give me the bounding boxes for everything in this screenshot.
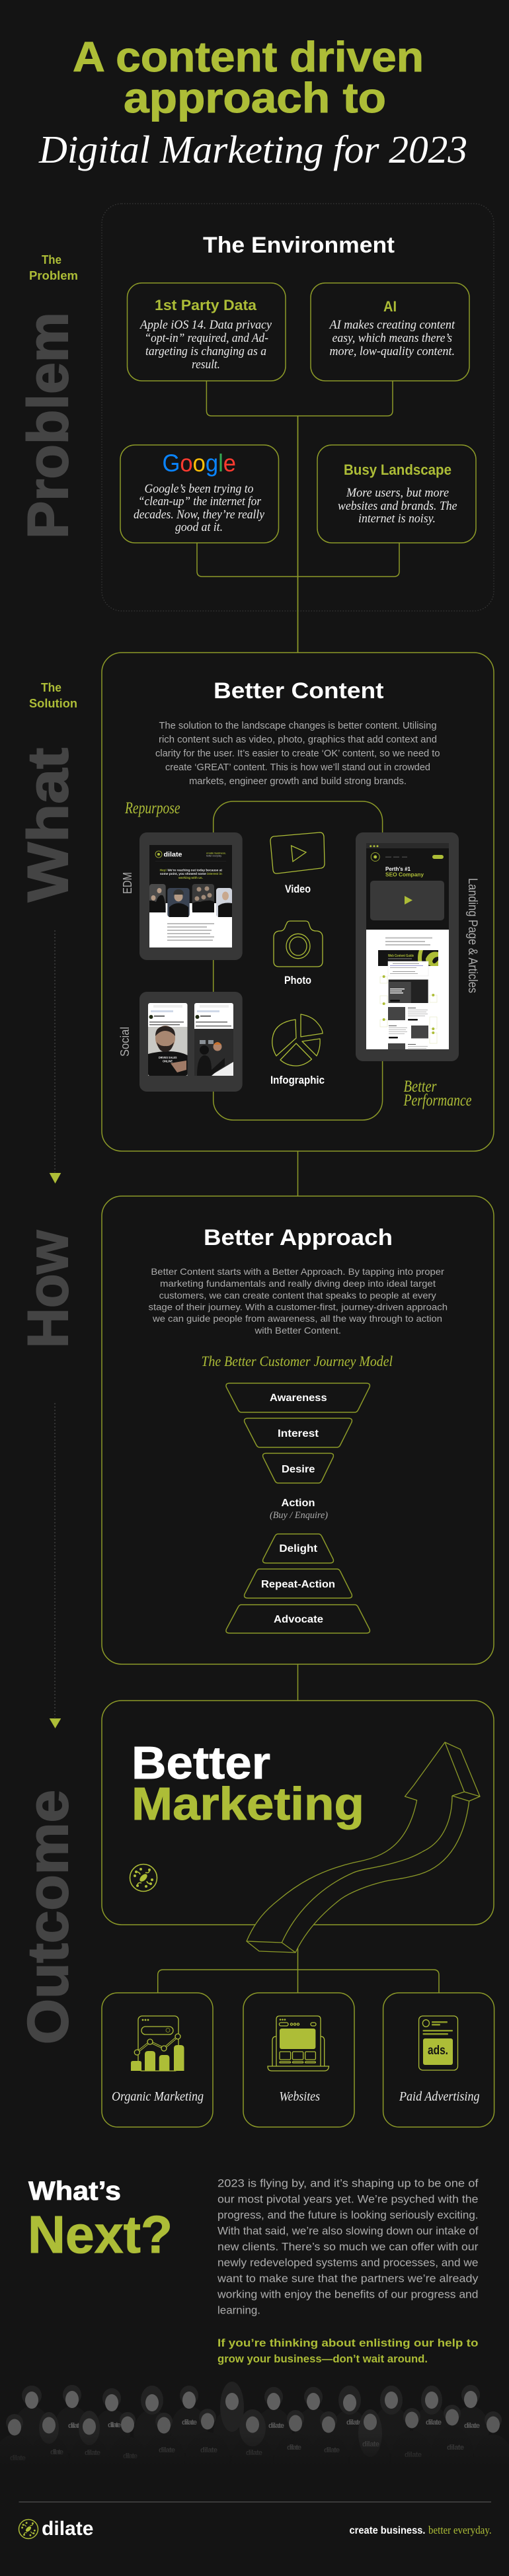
heading: Better Approach: Better Approach <box>204 1225 393 1250</box>
footer: tagline <box>349 2524 492 2536</box>
title <box>38 33 467 171</box>
heading: Better Marketing <box>132 1737 364 1830</box>
back row <box>13 2382 489 2457</box>
device: Landing page: Perth’s #1 <box>385 866 411 872</box>
text block: what's next copy <box>217 2177 479 2316</box>
connector: top cards <box>206 381 393 416</box>
text block: approach copy: Better Content starts with a Better Approach. By tapping into proper <box>151 1266 444 1277</box>
web content guide banner: Web Content Guide <box>388 954 414 958</box>
arrow: dashed down to Outcome <box>50 1403 61 1728</box>
heading: Better Marketing: Marketing <box>132 1778 364 1830</box>
body text placeholder lines <box>167 923 214 941</box>
icon: camera <box>274 921 323 967</box>
icon: website laptop <box>268 2016 329 2071</box>
card: AI: more, low-quality content. <box>329 344 455 358</box>
card: 1st Party Data: 1st Party Data <box>155 297 257 313</box>
card: Busy Landscape: More users, but more <box>346 486 449 500</box>
front row: dilate <box>447 2444 464 2452</box>
card: AI: easy, which means there’s <box>332 331 452 345</box>
heading: Better Marketing: Better <box>132 1737 270 1789</box>
front row: dilate <box>123 2452 137 2460</box>
card: Google: Google’s been trying to <box>144 482 254 496</box>
label: EDM: EDM <box>121 872 134 894</box>
text block: what's next copy: new clients. There’s so much we can offer with our <box>217 2241 479 2253</box>
front row: dilate <box>50 2448 63 2456</box>
card: 1st Party Data: result. <box>192 358 220 372</box>
card: 1st Party Data <box>127 283 286 381</box>
icon: ads phone <box>419 2016 457 2070</box>
panel: Better Approach <box>102 1196 494 1664</box>
heading: What's Next?: What’s <box>28 2177 121 2206</box>
connector: marketing to services <box>158 1947 439 1993</box>
funnel: Delight: Delight <box>279 1543 318 1554</box>
footer: dilate logo: dilate <box>42 2518 94 2540</box>
text block: what's next copy: 2023 is flying by, and it’s shaping up to be one of <box>217 2177 479 2189</box>
content loop outline <box>214 801 383 1120</box>
label: Better Performance: Better <box>403 1078 437 1096</box>
card: Paid Advertising <box>383 1993 494 2127</box>
icon: video <box>270 832 325 873</box>
card: 1st Party Data: Apple iOS 14. Data privacy <box>139 318 272 332</box>
photo: team <box>0 2382 509 2498</box>
section label: The Solution: Solution <box>29 697 77 710</box>
label: Video: Video <box>285 883 311 895</box>
vertical heading: Outcome: Outcome <box>17 1790 80 2044</box>
text block: solution copy: clarity for the user. It’s easier to create ‘OK’ content, so we need to <box>155 748 440 759</box>
card: Google: “clean-up” the internet for <box>138 495 262 508</box>
title: Digital Marketing for 2023 <box>38 128 467 171</box>
text block: solution copy: rich content such as video, photo, graphics that add context and <box>159 735 437 745</box>
front row: dilate <box>405 2451 422 2459</box>
text block: approach copy: with Better Content. <box>254 1325 341 1336</box>
label: Landing Page & Articles: Landing Page & Articles <box>465 878 479 993</box>
web content guide banner <box>378 950 438 966</box>
text block: what's next copy: want to make sure that the partners we’re already <box>217 2273 479 2284</box>
card: Organic Marketing <box>102 1993 213 2127</box>
social post one <box>148 1003 188 1076</box>
card: Busy Landscape: websites and brands. The <box>338 499 457 513</box>
card: Paid Advertising: Paid Advertising <box>399 2089 480 2104</box>
text block: approach copy: customers, we can create content that speaks to people at every <box>159 1290 436 1301</box>
text block: what's next copy: our most pivotal years yet. We’re psyched with the <box>217 2193 479 2205</box>
heading: The Environment: The Environment <box>203 233 395 258</box>
device: Landing page: SEO Company <box>385 871 424 878</box>
funnel: Desire <box>263 1453 333 1483</box>
card: AI <box>311 283 469 381</box>
icon: ads phone: ads. <box>428 2044 448 2058</box>
card: Busy Landscape <box>317 445 476 543</box>
text block: solution copy: markets, engineer growth and build strong brands. <box>189 776 407 787</box>
front row: dilate <box>10 2454 26 2462</box>
callout: call to action <box>217 2337 479 2365</box>
funnel: Awareness: Awareness <box>270 1392 327 1404</box>
front row: dilate <box>246 2449 262 2457</box>
label: Better Performance: Performance <box>403 1092 472 1109</box>
section label: The Problem <box>29 253 78 282</box>
front row: dilate <box>324 2446 340 2454</box>
social post two <box>194 1003 233 1076</box>
front row: dilate <box>362 2440 379 2448</box>
connector: content to approach <box>297 1151 299 1196</box>
footer: tagline: better everyday. <box>428 2524 492 2536</box>
text block: approach copy <box>148 1266 448 1336</box>
icon: growth arrow <box>247 1742 480 1952</box>
section label: The Solution <box>29 681 77 710</box>
label: Infographic: Infographic <box>270 1074 325 1086</box>
device: Social posts <box>139 992 243 1092</box>
text block: what's next copy: With that said, we’re also slowing down our intake of <box>217 2225 479 2237</box>
card: Google <box>120 445 279 543</box>
funnel: Desire: Desire <box>282 1464 315 1475</box>
footer: tagline: create business. <box>349 2525 426 2536</box>
panel: The Environment <box>102 204 494 611</box>
back row: dilate <box>268 2422 284 2430</box>
panel: Better Marketing <box>102 1701 494 1925</box>
device: EDM email: dilate <box>164 852 182 858</box>
front row: dilate <box>287 2444 301 2452</box>
back row: dilate <box>464 2422 480 2430</box>
device: Landing page <box>356 832 459 1061</box>
funnel: Action: (Buy / Enquire) <box>270 1510 328 1521</box>
funnel: Advocate <box>226 1605 370 1633</box>
photo: team group <box>149 884 166 912</box>
front row: dilate <box>200 2446 217 2454</box>
panel: Better Content <box>102 653 494 1151</box>
connector line over environment <box>297 416 299 653</box>
funnel: Awareness <box>226 1383 370 1412</box>
icon: dilate mark <box>130 1865 157 1891</box>
funnel: Advocate: Advocate <box>274 1614 323 1625</box>
label: Repurpose: Repurpose <box>124 799 180 817</box>
funnel: Repeat-Action: Repeat-Action <box>261 1579 335 1590</box>
icon: organic chart <box>131 2016 184 2071</box>
label: Better Performance <box>403 1078 472 1109</box>
device: EDM email: Hey! We’re reaching out today because at <box>160 869 223 871</box>
vertical heading: Problem: Problem <box>17 312 80 539</box>
funnel: Interest <box>245 1418 352 1447</box>
device: EDM email: create business. <box>206 852 226 854</box>
connector: approach to marketing <box>297 1664 299 1701</box>
heading: What's Next?: Next? <box>28 2205 173 2264</box>
footer divider <box>19 2501 491 2503</box>
front row <box>0 2405 509 2491</box>
funnel: Repeat-Action <box>245 1569 352 1598</box>
vertical heading: How: How <box>17 1230 80 1348</box>
label: Social: Social <box>118 1027 132 1057</box>
social post one: DRIVES SALES <box>159 1056 177 1059</box>
callout: call to action: grow your business—don’t wait around. <box>217 2353 428 2365</box>
icon: Google wordmark: Google <box>163 450 236 477</box>
funnel: Action <box>270 1498 328 1521</box>
funnel: Interest: Interest <box>278 1428 319 1439</box>
back row: dilate <box>426 2419 442 2427</box>
text block: what's next copy: newly redeveloped systems and processes, and we <box>217 2257 479 2269</box>
card: Google: decades. Now, they’re really <box>134 508 265 522</box>
card: 1st Party Data: “opt-in” required, and Ad- <box>144 331 268 345</box>
card: AI: AI makes creating content <box>329 318 455 332</box>
card: AI: AI <box>383 298 397 315</box>
text block: what's next copy: progress, and the future is looking seriously exciting. <box>217 2209 479 2221</box>
photo: man with cap <box>167 888 190 917</box>
back row: dilate <box>108 2421 121 2429</box>
device: EDM email: better everyday <box>206 854 221 857</box>
card: Websites: Websites <box>279 2089 320 2104</box>
card: Organic Marketing: Organic Marketing <box>112 2089 204 2104</box>
heading: What's Next? <box>28 2177 173 2264</box>
back row: dilate <box>346 2419 362 2427</box>
card: Busy Landscape: Busy Landscape <box>344 462 451 478</box>
callout: call to action: If you’re thinking about enlisting our help to <box>217 2337 479 2349</box>
icon: pie chart <box>272 1014 323 1066</box>
text block: solution copy: create ‘GREAT’ content. This is how we’ll stand out in crowded <box>165 762 430 773</box>
page annotations <box>380 975 437 1043</box>
device: EDM email: working with us. <box>178 876 203 879</box>
photo: woman <box>216 888 232 917</box>
text block: approach copy: we can guide people from awareness, all the way through to action <box>152 1313 442 1324</box>
front row: dilate <box>159 2446 175 2454</box>
back row: dilate <box>182 2419 197 2427</box>
card: Websites <box>243 1993 354 2127</box>
text block: solution copy: The solution to the landscape changes is better content. Utilising <box>159 721 436 731</box>
main connector line <box>297 416 299 653</box>
text block: solution copy <box>155 721 440 787</box>
card: Busy Landscape: internet is noisy. <box>358 512 436 526</box>
funnel: Action: Action <box>282 1498 315 1509</box>
arrow: dashed down to How <box>50 930 61 1184</box>
subheading: customer journey model: The Better Customer Journey Model <box>201 1353 393 1369</box>
text block: what's next copy: learning. <box>217 2304 260 2316</box>
title: approach to <box>124 74 386 122</box>
back row: dilate <box>68 2422 83 2430</box>
social post one: ONLINE <box>163 1059 173 1063</box>
title: A content driven <box>73 33 424 81</box>
section label: The Solution: The <box>41 681 61 694</box>
text block: approach copy: stage of their journey. With a customer-first, journey-driven approach <box>148 1301 448 1312</box>
footer: dilate logo <box>19 2518 94 2540</box>
device: EDM email: some point, you showed some interest in <box>160 872 222 875</box>
photo: team of four <box>192 884 214 912</box>
label: Photo: Photo <box>284 974 311 986</box>
section label: The Problem: Problem <box>29 269 78 282</box>
card: Google: good at it. <box>175 520 223 534</box>
card: 1st Party Data: targeting is changing as a <box>145 344 266 358</box>
connector: bottom cards <box>197 543 399 577</box>
front row: dilate <box>85 2449 100 2457</box>
vertical heading: What: What <box>17 748 80 902</box>
device: EDM email <box>139 832 243 960</box>
heading: Better Content: Better Content <box>214 678 383 704</box>
funnel: Delight <box>263 1534 333 1563</box>
text block: what's next copy: working with enjoy the benefits of our progress and <box>217 2288 479 2300</box>
section label: The Problem: The <box>42 253 61 266</box>
text block: approach copy: marketing fundamentals and really diving deep into ideal target <box>160 1278 436 1289</box>
